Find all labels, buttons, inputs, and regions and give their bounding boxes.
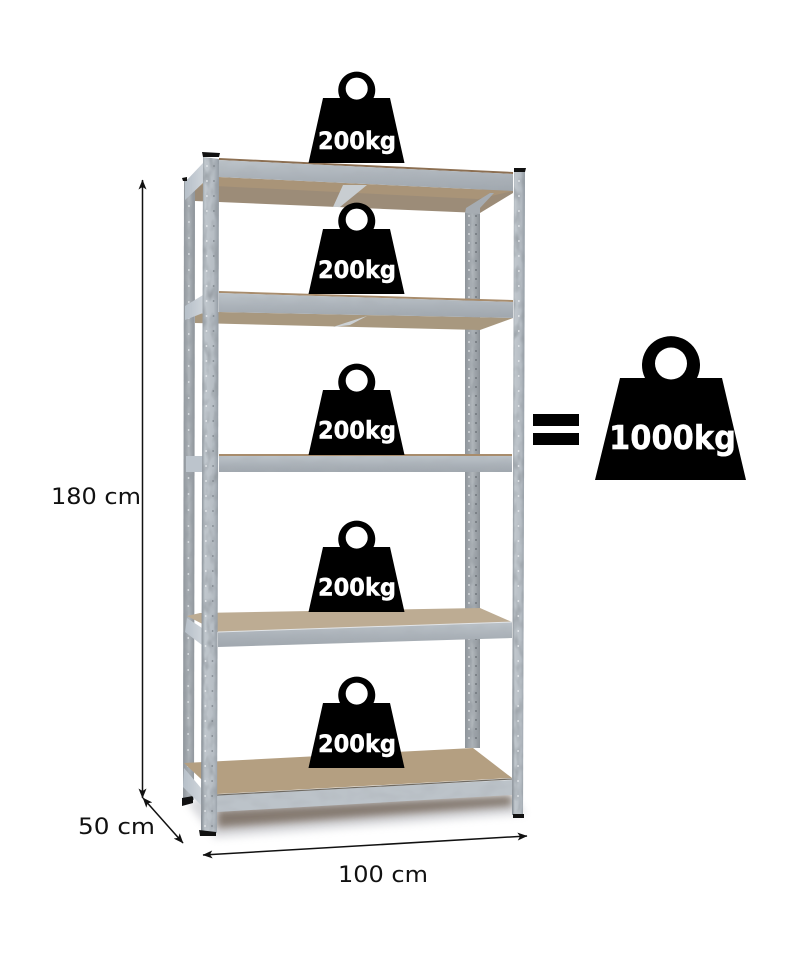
depth label: 50 cm — [78, 815, 155, 840]
weight 3: 200kg — [308, 364, 404, 455]
weight 2: 200kg: 200kg — [318, 256, 396, 284]
weight 3: 200kg: 200kg — [318, 416, 396, 444]
shelf 5 (bottom) — [183, 748, 512, 812]
back left post — [182, 178, 195, 806]
weight 4: 200kg: 200kg — [318, 574, 396, 602]
front left post — [199, 152, 220, 836]
total weight: 1000kg — [595, 336, 746, 480]
shelf 2 — [185, 291, 513, 330]
shelf 4 — [185, 608, 512, 647]
weight 5: 200kg: 200kg — [318, 730, 396, 758]
shelf 3 — [186, 454, 512, 472]
back right post — [465, 205, 480, 748]
weight 5: 200kg — [308, 677, 404, 768]
height arrow — [142, 180, 144, 798]
weight 2: 200kg — [308, 203, 404, 294]
shelf 1 (top) — [185, 158, 513, 214]
weight 1: 200kg: 200kg — [318, 127, 396, 155]
total weight: 1000kg: 1000kg — [609, 418, 736, 457]
width arrow — [203, 836, 527, 855]
weight 1: 200kg — [308, 72, 404, 163]
weight 4: 200kg — [308, 521, 404, 612]
width label: 100 cm — [338, 863, 428, 888]
depth arrow — [143, 798, 183, 843]
floor shadow — [188, 795, 525, 838]
front right post — [512, 168, 526, 818]
height label: 180 cm — [51, 485, 141, 510]
equals sign — [533, 414, 579, 445]
back left cap — [182, 177, 187, 181]
